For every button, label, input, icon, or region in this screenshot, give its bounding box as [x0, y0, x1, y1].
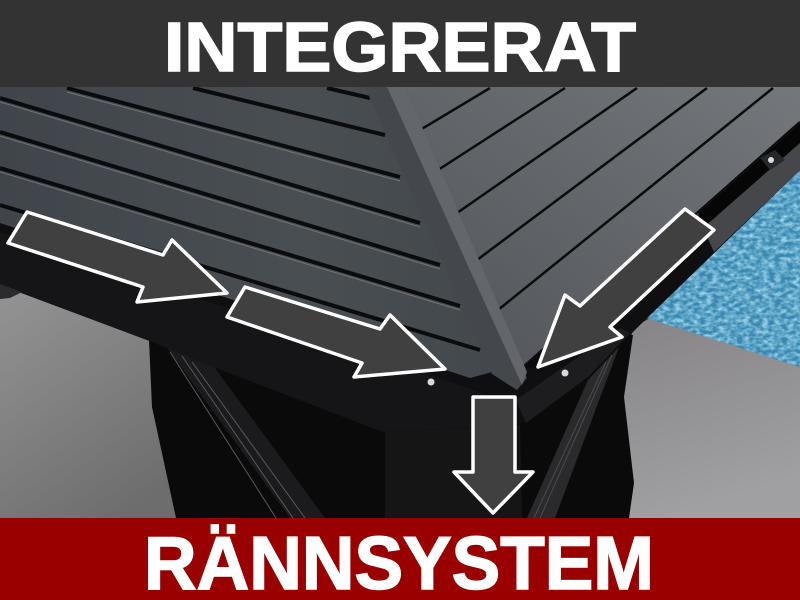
- ridge cap: [365, 87, 527, 390]
- corner bolts: [428, 370, 568, 386]
- photo: gazebo roof corner: [0, 87, 800, 520]
- arrow: downward along post: [454, 397, 533, 513]
- gutter opening, right side: [698, 123, 800, 228]
- heading: top: INTEGRERAT: [164, 8, 636, 86]
- support end, left edge: [0, 284, 22, 299]
- curtain and posts: [149, 335, 634, 518]
- arrow: upper-left pointing to gutter: [8, 212, 227, 302]
- roof panel: right: [400, 87, 800, 372]
- pool water: [640, 165, 800, 370]
- clip bracket on gutter: [760, 150, 785, 170]
- arrow: right pointing to corner: [538, 209, 714, 367]
- roof frame beam: [0, 123, 800, 432]
- top banner: [0, 0, 800, 87]
- bottom banner: [0, 518, 800, 600]
- floor: left paving: [0, 280, 200, 520]
- roof panel: left: [0, 87, 500, 387]
- floor: right paving: [600, 318, 800, 518]
- arrow: middle pointing to corner: [227, 287, 445, 377]
